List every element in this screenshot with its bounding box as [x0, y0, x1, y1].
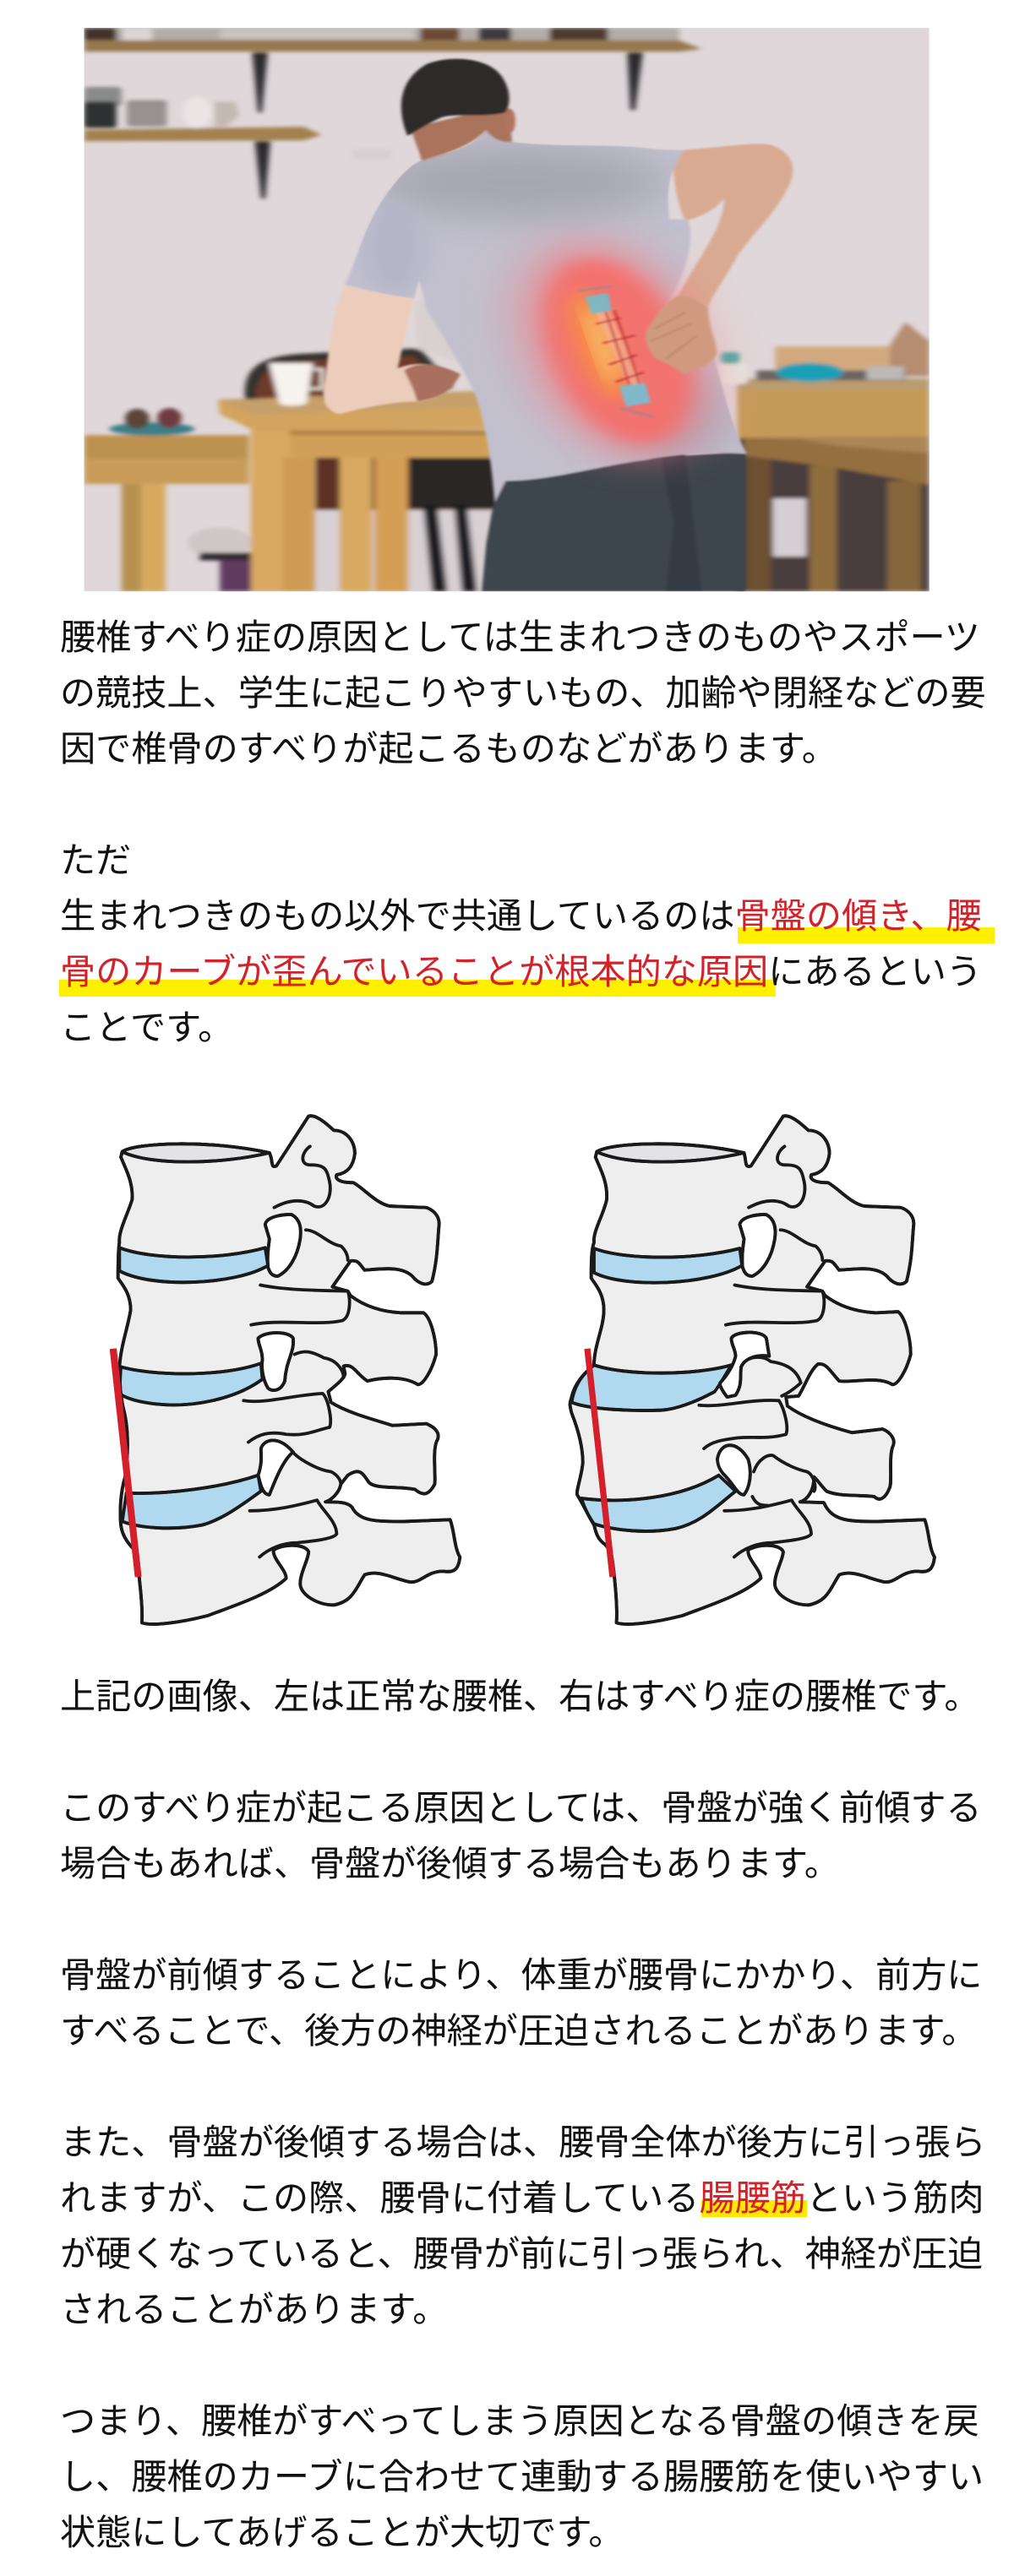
top endplate	[597, 1144, 744, 1162]
paragraph: common root cause with highlight: ことです。	[60, 1008, 233, 1047]
chair back and cup	[245, 348, 453, 399]
bone silhouette	[118, 1116, 460, 1624]
intervertebral discs	[594, 1248, 742, 1283]
paragraph: pelvic tilt as cause	[60, 1788, 982, 1883]
outlines	[597, 1116, 913, 1287]
hand on the back	[646, 295, 717, 374]
paragraph: conclusion: し、腰椎のカーブに合わせて連動する腸腰筋を使いやすい	[60, 2457, 984, 2497]
photo: man holding his aching lower back	[84, 28, 930, 591]
wall	[84, 28, 930, 591]
paragraph: causes of spondylolisthesis: 因で椎骨のすべりが起こるものなどがあります。	[60, 729, 837, 769]
paragraph: diagram caption: 上記の画像、左は正常な腰椎、右はすべり症の腰椎です。	[60, 1677, 980, 1716]
foramina	[739, 1215, 775, 1276]
top endplate	[123, 1144, 270, 1162]
paragraph: posterior pelvic tilt and iliopsoas: れますが、この際、腰骨に付着している腸腰筋という筋肉	[60, 2178, 984, 2218]
right table	[737, 378, 930, 391]
main table	[315, 458, 503, 510]
paragraph: common root cause with highlight: 骨のカーブが歪んでいることが根本的な原因にあるという	[60, 952, 982, 992]
spine illustration	[579, 286, 653, 417]
patterned cloth behind arm	[412, 302, 455, 358]
paragraph: causes of spondylolisthesis: 腰椎すべり症の原因としては生まれつきのものやスポーツ	[60, 617, 980, 657]
bone silhouette	[570, 1116, 935, 1624]
jeans	[482, 452, 745, 591]
shade behind pot and pot	[188, 528, 252, 558]
red alignment line	[584, 1348, 616, 1578]
paragraph: posterior pelvic tilt and iliopsoas: が硬くなっていると、腰骨が前に引っ張られ、神経が圧迫	[60, 2234, 983, 2274]
outlines	[123, 1116, 439, 1287]
paragraph: pelvic tilt as cause: このすべり症が起こる原因としては、骨盤が強く前傾する	[60, 1788, 982, 1828]
paragraph: anterior pelvic tilt: 骨盤が前傾することにより、体重が腰骨にかかり、前方に	[60, 1955, 982, 1995]
paragraph: conclusion	[60, 2401, 984, 2552]
foramina	[265, 1215, 301, 1276]
back table left	[84, 435, 249, 459]
paragraph: anterior pelvic tilt	[60, 1955, 982, 2051]
paragraph: anterior pelvic tilt: すべることで、後方の神経が圧迫されることがあります。	[60, 2011, 978, 2051]
diagram: normal lumbar spine (left)	[110, 1114, 461, 1626]
left forearm	[323, 286, 461, 414]
paragraph: conclusion: 状態にしてあげることが大切です。	[60, 2513, 624, 2552]
diagram: slipped lumbar spine (right)	[568, 1114, 936, 1626]
intervertebral discs	[119, 1247, 268, 1282]
red alignment line	[110, 1348, 142, 1578]
head and neck	[411, 105, 512, 161]
paragraph: conclusion: つまり、腰椎がすべってしまう原因となる骨盤の傾きを戻	[60, 2401, 979, 2441]
right arm	[673, 144, 793, 307]
paragraph: common root cause with highlight: 生まれつきのもの以外で共通しているのは骨盤の傾き、腰	[60, 896, 982, 936]
shelves	[84, 41, 701, 52]
shirt	[345, 130, 747, 503]
paragraph: pelvic tilt as cause: 場合もあれば、骨盤が後傾する場合もあります。	[60, 1844, 840, 1883]
paragraph: common root cause with highlight	[59, 840, 995, 1047]
pain glow	[493, 231, 735, 468]
shelf items	[84, 28, 679, 41]
paragraph: causes of spondylolisthesis	[60, 617, 986, 769]
paragraph: common root cause with highlight: ただ	[60, 840, 131, 880]
paragraph: posterior pelvic tilt and iliopsoas: されることがあります。	[60, 2290, 448, 2329]
paragraph: causes of spondylolisthesis: の競技上、学生に起こりやすいもの、加齢や閉経などの要	[60, 673, 986, 713]
box and bowl on the right	[775, 346, 890, 371]
paragraph: posterior pelvic tilt and iliopsoas: また、骨盤が後傾する場合は、腰骨全体が後方に引っ張ら	[60, 2122, 986, 2162]
paragraph: posterior pelvic tilt and iliopsoas	[60, 2122, 986, 2329]
